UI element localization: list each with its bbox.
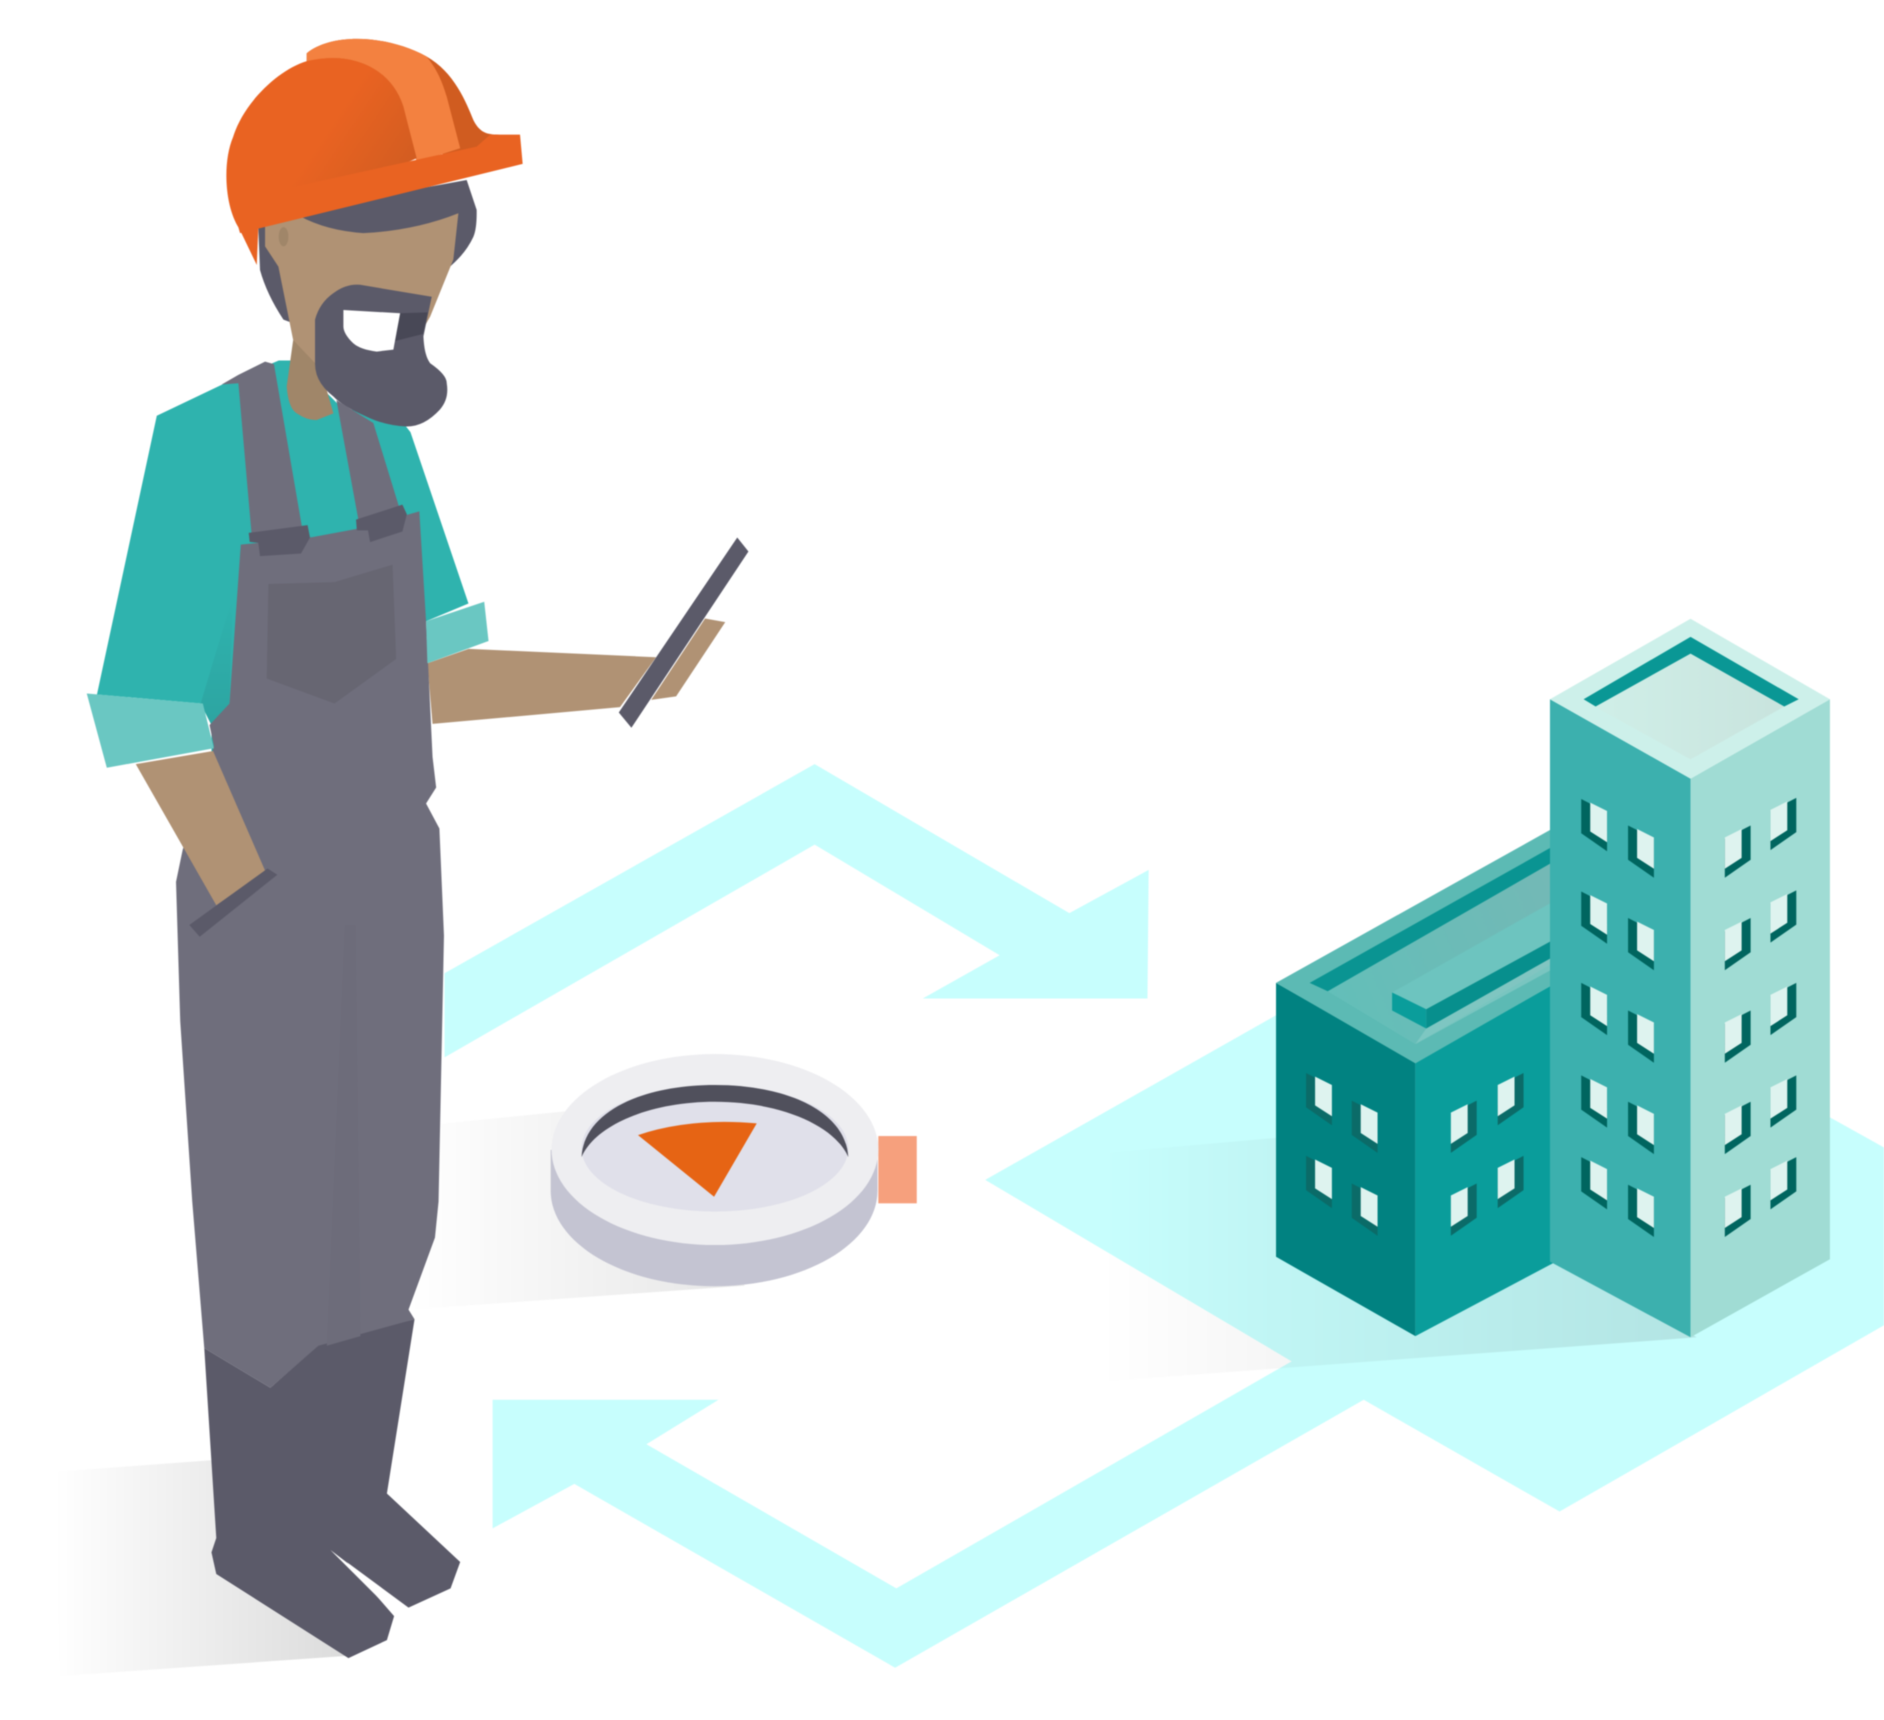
pocket phone (189, 868, 277, 937)
tower left face (1550, 699, 1691, 1337)
compass (551, 1054, 917, 1286)
tower windows right (1725, 798, 1796, 1237)
left strap (222, 362, 303, 538)
building shadow (1099, 1138, 1697, 1382)
helmet main dome (226, 58, 417, 265)
overalls (176, 511, 444, 1388)
right buckle (356, 505, 407, 542)
compass top ring (552, 1054, 878, 1245)
tower right face (1691, 699, 1830, 1337)
low block right face (1415, 983, 1556, 1336)
tower windows left (1581, 799, 1654, 1237)
low block roof (1276, 827, 1556, 1063)
worker (87, 39, 748, 1658)
building (1276, 619, 1830, 1337)
compass shadow (409, 1111, 745, 1310)
left forearm (136, 751, 265, 905)
face (265, 213, 458, 397)
overalls leg shade (327, 925, 360, 1346)
right boot (315, 1319, 460, 1608)
helmet light stripe (307, 39, 460, 162)
right strap (336, 400, 401, 524)
worker shadow (54, 1460, 348, 1676)
helmet back dome (306, 39, 519, 162)
beard (315, 285, 447, 427)
low block windows right (1451, 1073, 1524, 1236)
hand behind phone (651, 619, 725, 700)
upper cycle arrow (445, 764, 1149, 1057)
compass dial (582, 1085, 848, 1212)
compass orange tab (878, 1136, 917, 1203)
left cuff (87, 694, 214, 768)
neck (287, 340, 333, 420)
shirt fold shade (201, 595, 233, 725)
tower roof (1550, 619, 1830, 779)
phone (619, 537, 748, 728)
right arm (427, 649, 656, 724)
ground diamond with lower cycle arrow (493, 961, 1884, 1668)
low block left face (1276, 983, 1415, 1336)
right cuff (426, 602, 489, 663)
compass dark crescent (582, 1085, 848, 1157)
compass needle (638, 1122, 757, 1197)
left buckle (249, 525, 310, 556)
shirt (97, 360, 468, 769)
mouth shadow (394, 312, 428, 341)
helmet brim (231, 135, 523, 233)
mouth (343, 310, 400, 352)
compass side wall (551, 1150, 877, 1286)
boot gap (330, 1550, 406, 1614)
low block windows left (1306, 1073, 1378, 1236)
ear mark (279, 227, 288, 246)
helmet (226, 39, 523, 265)
hair (258, 180, 477, 348)
left boot (204, 1340, 394, 1658)
bib pocket (267, 565, 396, 704)
